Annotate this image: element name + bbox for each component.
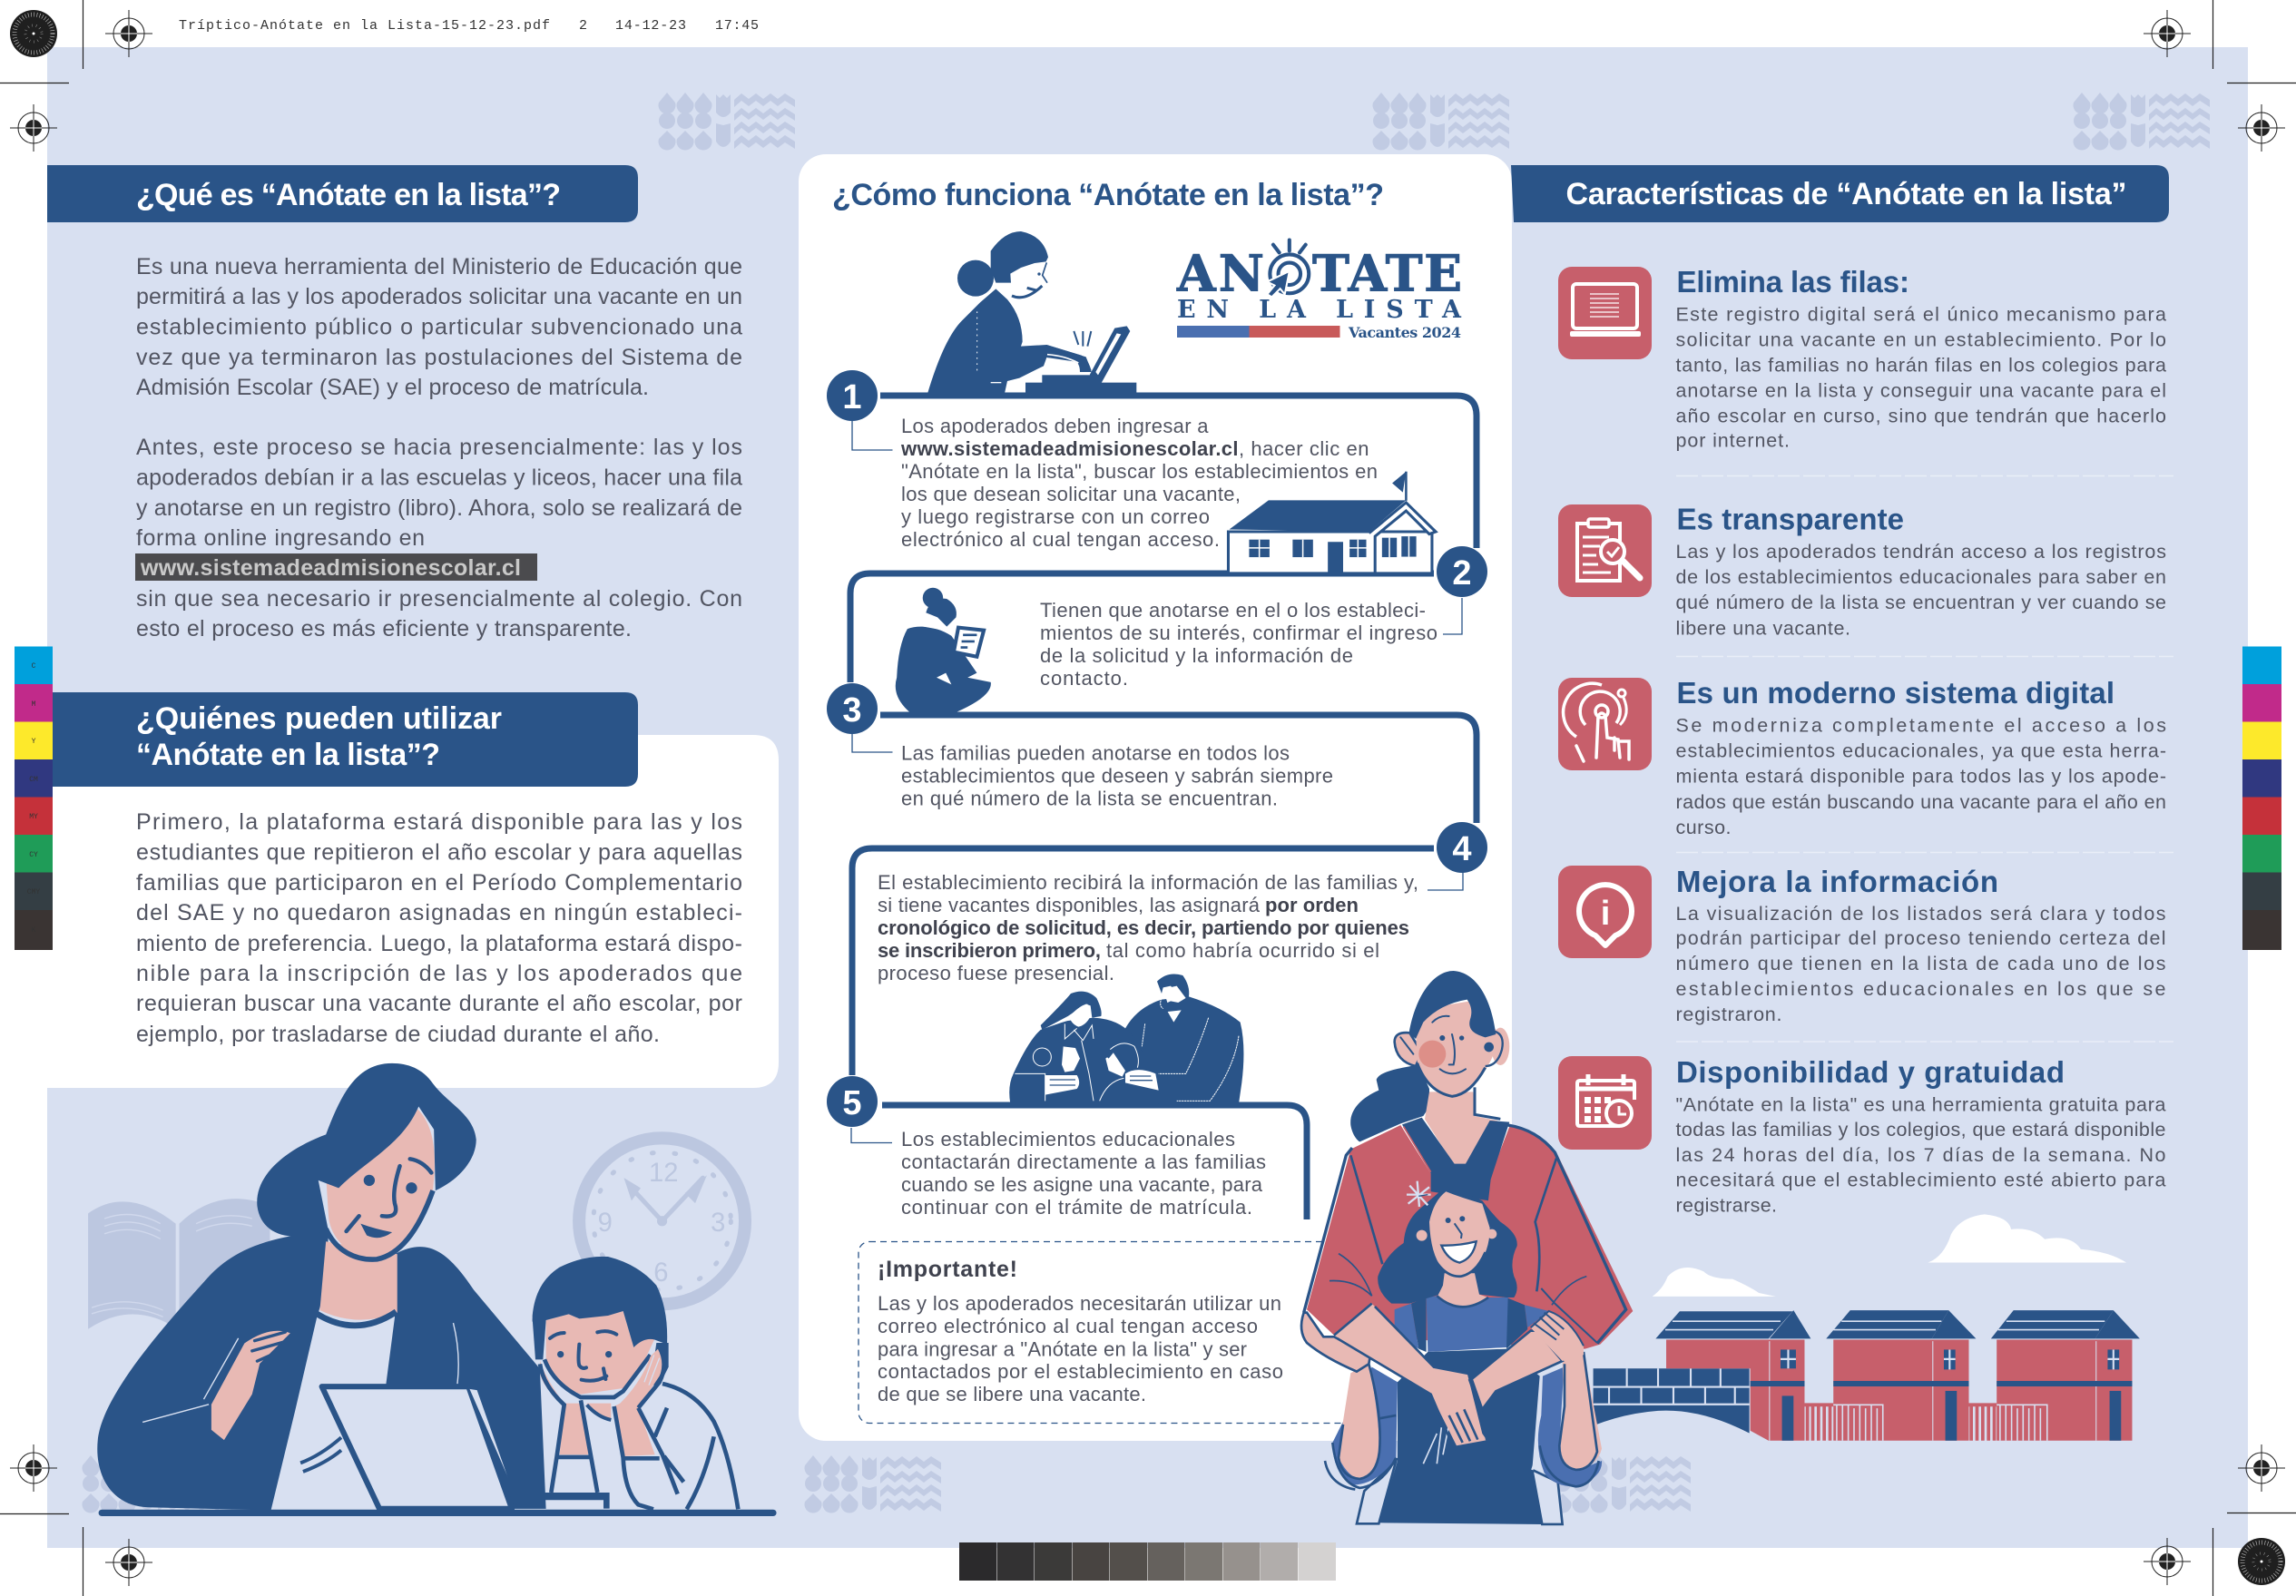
print slug line: [179, 18, 759, 34]
step 1: [900, 415, 1378, 551]
feature: mejora la informacion: podrán participar del proceso teniendo certeza del: [1675, 927, 2165, 949]
text block: quienes: [136, 809, 742, 1047]
number 1: [827, 370, 878, 421]
color bar left: C: [32, 662, 36, 671]
feature: mejora la informacion: Mejora la información: [1676, 865, 1998, 898]
house 3: [1991, 1310, 2140, 1441]
left hand: [540, 1361, 588, 1454]
step 1: "Anótate en la lista", buscar los establecimientos en: [901, 460, 1378, 483]
text block: quienes: familias que participaron en el Período Complementario: [136, 870, 742, 896]
feature: sistema digital: curso.: [1675, 817, 1732, 838]
step 2: Tienen que anotarse en el o los estableci-: [1040, 599, 1426, 622]
number 4: 4: [1452, 830, 1472, 868]
feature: mejora la informacion: número que tienen en la lista de cada uno de los: [1675, 953, 2165, 974]
hair back: [533, 1318, 546, 1359]
heading: como funciona: ¿Cómo funciona “Anótate en la lista”?: [832, 178, 1384, 212]
feature: sistema digital: Es un moderno sistema digital: [1677, 676, 2114, 710]
step number circles: [827, 370, 1487, 1127]
step 2: contacto.: [1040, 667, 1128, 690]
shirt: [614, 1384, 738, 1509]
feature: elimina las filas: solicitar una vacante en un establecimiento. Por lo: [1675, 329, 2166, 351]
color bar left: M: [32, 700, 36, 709]
step 5: continuar con el trámite de matrícula.: [901, 1196, 1252, 1219]
feature: sistema digital: establecimientos educacionales, ya que esta herra-: [1675, 740, 2166, 762]
icon: info pin: [1558, 866, 1652, 958]
feature: es transparente: libere una vacante.: [1675, 617, 1850, 639]
feature: es transparente: Es transparente: [1677, 503, 1904, 536]
illustration: mother and daughter: [1301, 971, 1633, 1524]
feature: mejora la informacion: establecimientos educacionales en los que se: [1675, 978, 2165, 1000]
feature: sistema digital: mienta estará disponible para todos las y los apode-: [1675, 766, 2166, 788]
feature: disponibilidad y gratuidad: las 24 horas del día, los 7 días de la semana. No: [1675, 1144, 2166, 1166]
feature: mejora la informacion: [1558, 865, 2165, 1025]
number 5: [827, 1076, 878, 1127]
step 1: www.sistemadeadmisionescolar.cl: [900, 437, 1238, 460]
step 1: , hacer clic en: [1239, 437, 1369, 460]
fence 1: [1804, 1405, 1883, 1441]
text block: quienes: nible para la inscripción de las y los apoderados que: [136, 961, 742, 986]
text blocks: steps: [878, 415, 1437, 1219]
logo: Vacantes 2024: [1348, 324, 1461, 341]
illustration: houses and bridge: [1594, 1310, 2140, 1441]
illustration: clock: 12: [649, 1159, 678, 1188]
children: [1033, 1043, 1159, 1101]
callout: importante: [859, 1241, 1362, 1423]
bridge wall: [1594, 1368, 1750, 1434]
heading: caracteristicas: Características de “Anótate en la lista”: [1566, 177, 2127, 211]
heading: que es: [47, 165, 638, 222]
step 5: cuando se les asigne una vacante, para: [901, 1173, 1263, 1196]
step 4: El establecimiento recibirá la información de las familias y,: [878, 871, 1418, 894]
feature: disponibilidad y gratuidad: "Anótate en la lista" es una herramienta gratuita para: [1675, 1093, 2166, 1115]
heading: quienes: [47, 692, 638, 787]
color bar left: K: [32, 926, 36, 935]
heading: caracteristicas: [1511, 165, 2169, 222]
number 3: 3: [842, 691, 862, 729]
number 5: 5: [842, 1084, 862, 1122]
number 2: 2: [1452, 554, 1472, 592]
step 4: cronológico de solicitud, es decir, partiendo por quienes: [878, 916, 1409, 939]
text block: que es: esto el proceso es más eficiente y transparente.: [136, 616, 632, 641]
laptop base: [545, 1493, 610, 1509]
illustration: school: [1228, 472, 1436, 573]
neck and straps: [1402, 1087, 1509, 1200]
step 3: Las familias pueden anotarse en todos los: [901, 742, 1290, 764]
feature: elimina las filas: anotarse en la lista y conseguir una vacante para el: [1675, 380, 2166, 402]
mother of family: [1009, 992, 1159, 1104]
illustration: woman typing on laptop: [927, 231, 1136, 395]
steps flow line: [850, 396, 1477, 1219]
feature: elimina las filas: Este registro digital será el único mecanismo para: [1675, 304, 2166, 326]
logo: AN: [1176, 243, 1264, 303]
father: [1125, 974, 1243, 1104]
text block: que es: www.sistemadeadmisionescolar.cl: [140, 555, 521, 581]
icon: laptop: [1558, 267, 1652, 359]
text block: que es: sin que sea necesario ir presencialmente al colegio. Con: [136, 586, 742, 612]
right hand: [614, 1347, 662, 1456]
ponytail: [1350, 1064, 1429, 1141]
skirt sides: [1357, 1461, 1563, 1524]
callout: importante: para ingresar a "Anótate en la lista" y ser: [878, 1337, 1247, 1361]
step 4: por orden: [1265, 894, 1359, 916]
illustration: clock: 3: [711, 1209, 725, 1238]
gray scale bar: [959, 1542, 1336, 1581]
step 1: y luego registrarse con un correo: [901, 505, 1210, 528]
illustration: clouds: [1653, 1214, 2126, 1297]
fence 2: [1968, 1405, 2047, 1441]
mother head: [1395, 971, 1509, 1096]
color bar left: CY: [29, 851, 38, 859]
text block: que es: permitirá a las y los apoderados solicitar una vacante en un: [136, 284, 742, 309]
step 1: los que desean solicitar una vacante,: [901, 483, 1241, 505]
table: [102, 1507, 773, 1519]
logo: TATE: [1312, 243, 1462, 303]
text block: quienes: Primero, la plataforma estará disponible para las y los: [136, 809, 742, 835]
icon: calendar with clock: [1558, 1056, 1652, 1150]
callout: importante: ¡Importante!: [878, 1257, 1017, 1282]
feature: elimina las filas: Elimina las filas:: [1677, 265, 1909, 299]
text block: quienes: requieran buscar una vacante durante el año escolar, por: [136, 991, 742, 1016]
panel: who can use (white background): [47, 735, 779, 1088]
text block: que es: apoderados debían ir a las escuelas y liceos, hacer una fila: [136, 465, 742, 490]
feature: elimina las filas: año escolar en curso, sino que tendrán que hacerlo: [1675, 406, 2166, 427]
heading: quienes: ¿Quiénes pueden utilizar: [136, 701, 502, 736]
feature: sistema digital: [1558, 676, 2166, 838]
text block: que es: vez que ya terminaron las postulaciones del Sistema de: [136, 345, 742, 370]
step 2: [1040, 599, 1437, 690]
face: [546, 1311, 655, 1395]
step 5: [901, 1128, 1266, 1219]
logo: EN LA LISTA: [1177, 296, 1462, 324]
icon: click cursor: [1267, 240, 1309, 297]
text block: que es: forma online ingresando en: [136, 525, 425, 551]
feature: disponibilidad y gratuidad: [1558, 1055, 2166, 1217]
daughter head: [1378, 1181, 1517, 1307]
text block: quienes: estudiantes que repitieron el año escolar y para aquellas: [136, 840, 742, 866]
illustration: clock: [579, 1138, 745, 1304]
laptop: [322, 1386, 519, 1509]
feature: es transparente: Las y los apoderados tendrán acceso a los registros: [1675, 541, 2166, 563]
panel: how it works (white background): [799, 154, 1512, 1441]
color bar left: [15, 646, 53, 950]
color bar left: Y: [32, 738, 36, 746]
color bar left: MY: [29, 813, 38, 821]
feature: mejora la informacion: La visualización de los listados será clara y todos: [1675, 903, 2165, 925]
feature: sistema digital: rados que están buscando una vacante para el año en: [1675, 791, 2166, 813]
color bar left: CMY: [27, 888, 40, 896]
arms and hands: [1301, 1288, 1602, 1490]
text block: que es: establecimiento público o particular subvencionado una: [136, 314, 742, 339]
feature: disponibilidad y gratuidad: registrarse.: [1675, 1195, 1777, 1217]
print slug line: Tríptico-Anótate en la Lista-15-12-23.pdf: [179, 18, 550, 34]
feature: es transparente: de los establecimientos educacionales para saber en: [1675, 566, 2166, 588]
step 5: Los establecimientos educacionales: [901, 1128, 1235, 1150]
illustration: book: [88, 1199, 270, 1329]
step 3: en qué número de la lista se encuentran.: [901, 788, 1278, 809]
feature: elimina las filas: [1558, 265, 2166, 452]
step 4: si tiene vacantes disponibles, las asignará: [878, 894, 1261, 916]
step 4: se inscribieron primero,: [878, 939, 1101, 962]
text block: quienes: ejemplo, por trasladarse de ciudad durante el año.: [136, 1022, 660, 1047]
step 1: Los apoderados deben ingresar a: [901, 415, 1209, 437]
print slug line: 14-12-23: [615, 18, 686, 34]
house 1: [1655, 1310, 1810, 1441]
feature: disponibilidad y gratuidad: Disponibilidad y gratuidad: [1676, 1055, 2065, 1089]
house 2: [1826, 1310, 1976, 1441]
step 2: de la solicitud y la información de: [1040, 644, 1353, 667]
number 1: 1: [842, 378, 862, 416]
feature: mejora la informacion: registraron.: [1675, 1004, 1782, 1025]
color bar left: CM: [29, 776, 38, 784]
step 4: proceso fuese presencial.: [878, 962, 1114, 984]
icon: info pin: i: [1601, 895, 1610, 933]
callout: importante: Las y los apoderados necesitarán utilizar un: [878, 1292, 1281, 1315]
icon: touch: [1558, 678, 1652, 770]
logo: [1176, 240, 1462, 341]
print slug line: 17:45: [715, 18, 759, 34]
callout: importante: correo electrónico al cual tengan acceso: [878, 1315, 1258, 1337]
step 3: establecimientos que deseen y sabrán siempre: [901, 764, 1333, 788]
feature: disponibilidad y gratuidad: necesitará que el establecimiento esté abierto para: [1675, 1170, 2166, 1191]
illustration: person reading tablet: [896, 588, 991, 712]
text block: que es: Admisión Escolar (SAE) y el proceso de matrícula.: [136, 375, 649, 400]
number 2: [1437, 546, 1487, 597]
text block: que es: Es una nueva herramienta del Ministerio de Educación que: [136, 254, 742, 279]
illustration: boy: [533, 1257, 738, 1509]
feature: disponibilidad y gratuidad: todas las familias y los colegios, que estará disponible: [1675, 1119, 2165, 1141]
text block: que es: [135, 254, 742, 641]
illustration: woman with laptop: [97, 1063, 773, 1513]
heading: que es: ¿Qué es “Anótate en la lista”?: [136, 178, 561, 212]
step 3: [901, 742, 1333, 809]
illustration: clock: 6: [653, 1258, 669, 1288]
illustration: family: [1009, 974, 1243, 1104]
number 3: [827, 683, 878, 734]
feature: sistema digital: Se moderniza completamente el acceso a los: [1675, 715, 2166, 737]
number 4: [1437, 822, 1487, 873]
step 4: tal como habría ocurrido si el: [1106, 939, 1379, 962]
step 4: [878, 871, 1418, 984]
step 1: electrónico al cual tengan acceso.: [901, 528, 1220, 551]
callout: importante: de que se libere una vacante.: [878, 1383, 1146, 1405]
color bar right: [2242, 646, 2281, 950]
red blouse: [1304, 1125, 1633, 1349]
feature: es transparente: qué número de la lista se encuentran y ver cuando se: [1675, 592, 2166, 613]
step 2: mientos de su interés, confirmar el ingreso: [1040, 622, 1437, 644]
text block: quienes: miento de preferencia. Luego, la plataforma estará dispo-: [136, 931, 742, 956]
step 5: contactarán directamente a las familias: [901, 1150, 1266, 1173]
illustration: clock: 9: [598, 1209, 613, 1238]
print slug line: 2: [579, 18, 587, 34]
dress: [1379, 1296, 1549, 1524]
icon: clipboard with magnifier: [1558, 504, 1652, 597]
feature: es transparente: [1558, 503, 2166, 639]
heading: quienes: “Anótate en la lista”?: [136, 738, 440, 772]
text block: quienes: del SAE y no quedaron asignadas en ningún estableci-: [136, 900, 742, 925]
text block: que es: y anotarse en un registro (libro). Ahora, solo se realizará de: [136, 495, 742, 521]
feature: elimina las filas: por internet.: [1675, 430, 1790, 452]
callout: importante: contactados por el establecimiento en caso: [878, 1360, 1283, 1383]
text block: que es: Antes, este proceso se hacia presencialmente: las y los: [136, 435, 742, 460]
feature: elimina las filas: tanto, las familias no harán filas en los colegios para: [1675, 355, 2166, 377]
